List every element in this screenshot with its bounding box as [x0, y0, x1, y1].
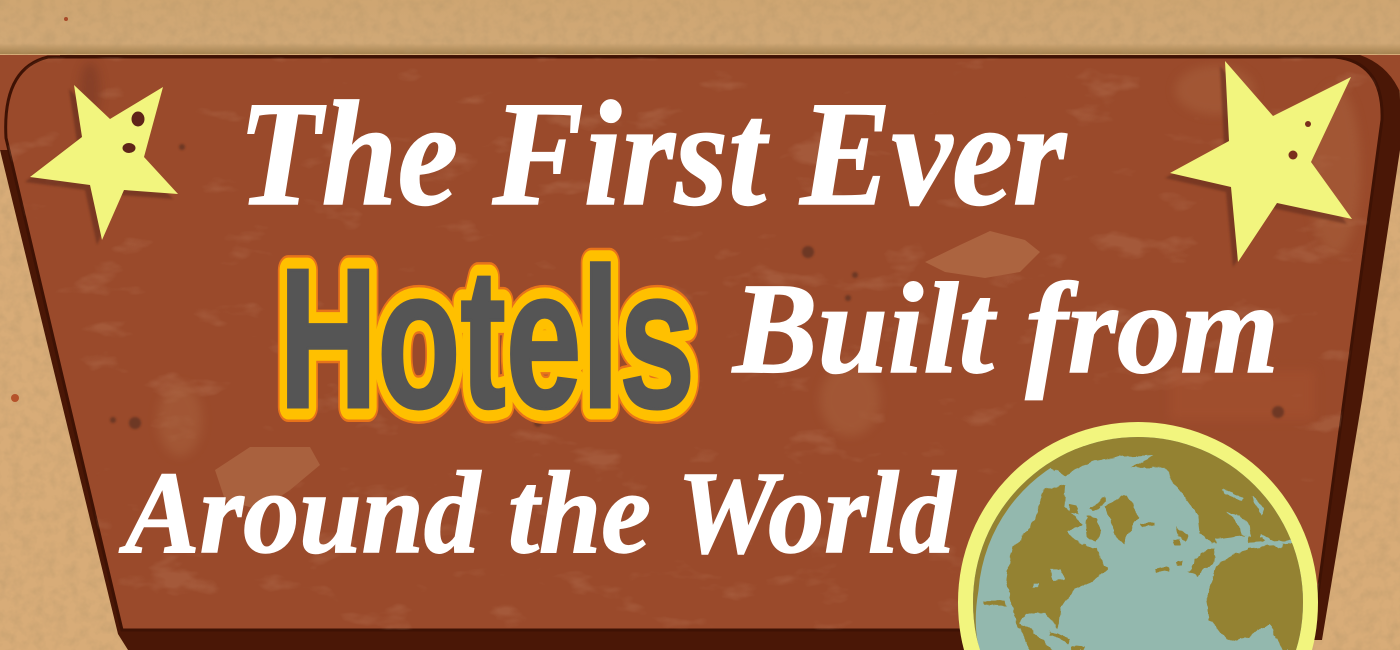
icon: left star	[25, 85, 178, 245]
title line 1: The First Ever	[238, 71, 1067, 237]
highlighted word: Hotels: Hotels	[279, 228, 695, 450]
title line 2: Built from	[731, 257, 1279, 401]
globe rim	[972, 447, 1085, 650]
highlighted word: Hotels: Hotels	[279, 228, 695, 450]
icon: right star	[1165, 61, 1352, 267]
title line 3: Around the World	[118, 447, 957, 578]
highlighted word: Hotels: Hotels	[279, 228, 695, 450]
highlighted word: Hotels	[279, 228, 695, 450]
world landmasses	[983, 423, 1310, 650]
inland seas	[1032, 488, 1283, 587]
icon: globe	[958, 422, 1318, 650]
